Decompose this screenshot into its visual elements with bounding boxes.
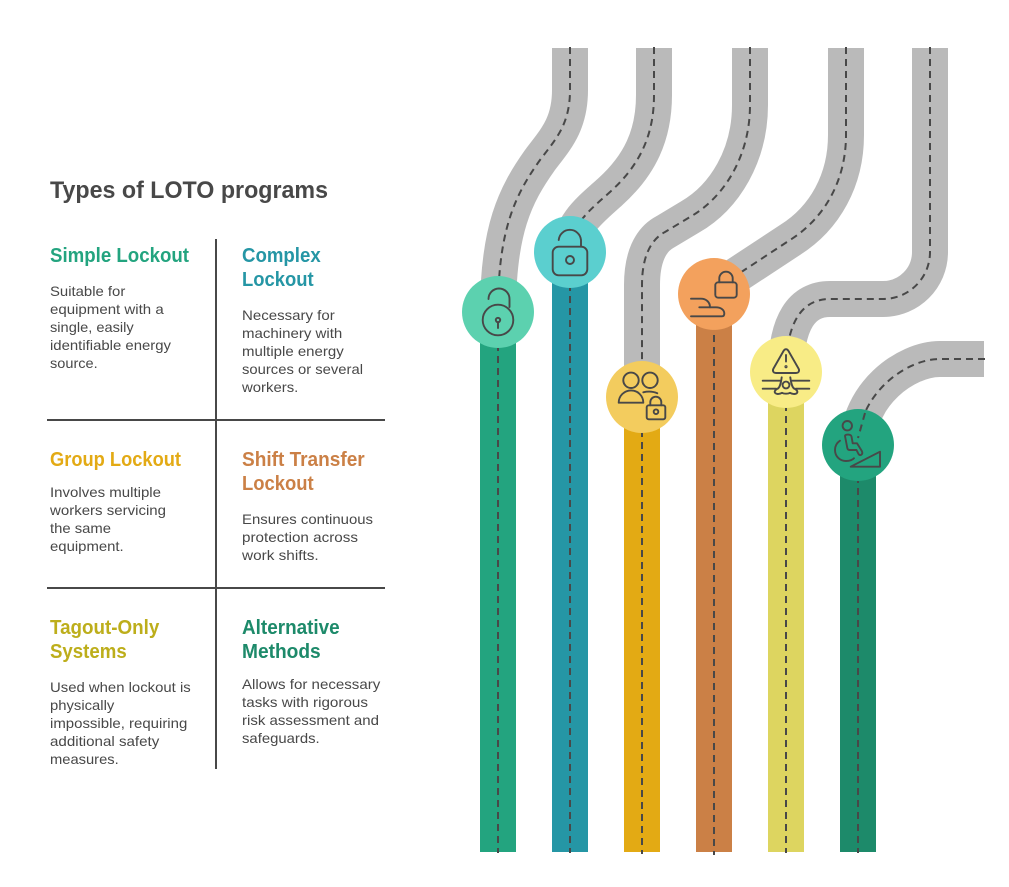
- icon: warning triangle with valve: [750, 336, 822, 408]
- icon: closed padlock: [534, 216, 606, 288]
- panel: tagout-only systems: measures.: [50, 751, 119, 767]
- panel: alternative methods: Methods: [242, 641, 321, 663]
- panel: alternative methods: Alternative: [242, 617, 340, 639]
- panel: group lockout: the same: [50, 520, 111, 536]
- road 6: alternative methods: [858, 359, 985, 445]
- panel: shift transfer lockout: [241, 449, 373, 563]
- panel: alternative methods: tasks with rigorous: [242, 694, 368, 710]
- column 3: amber: [624, 394, 660, 854]
- icon: hand with padlock: [678, 258, 750, 330]
- icon: open padlock: [462, 276, 534, 348]
- panel: group lockout: Involves multiple: [50, 484, 161, 500]
- road 3: group lockout: [642, 47, 750, 397]
- column 6: dark green: [840, 440, 876, 853]
- panel: shift transfer lockout: Shift Transfer: [242, 449, 365, 471]
- panel: simple lockout: Simple Lockout: [50, 245, 189, 267]
- panel: group lockout: equipment.: [50, 538, 124, 554]
- panel: simple lockout: [50, 245, 189, 371]
- panel: alternative methods: safeguards.: [242, 730, 320, 746]
- road 2: complex lockout: [570, 47, 654, 252]
- panel: tagout-only systems: physically: [50, 697, 114, 713]
- panel: complex lockout: Lockout: [242, 269, 314, 291]
- panel: complex lockout: Complex: [242, 245, 321, 267]
- panel: shift transfer lockout: protection across: [242, 529, 358, 545]
- panel: simple lockout: equipment with a: [50, 301, 164, 317]
- panel: complex lockout: workers.: [241, 379, 298, 395]
- panel: complex lockout: sources or several: [242, 361, 363, 377]
- panel: tagout-only systems: impossible, requiring: [50, 715, 187, 731]
- panel: tagout-only systems: Tagout-Only: [50, 617, 160, 639]
- panel: simple lockout: single, easily: [50, 319, 134, 335]
- panel: simple lockout: identifiable energy: [50, 337, 171, 353]
- panel: tagout-only systems: Systems: [50, 641, 127, 663]
- panel: complex lockout: Necessary for: [242, 307, 335, 323]
- panel: shift transfer lockout: work shifts.: [241, 547, 319, 563]
- icon: wheelchair on ramp: [822, 409, 894, 481]
- icon: group with padlock: [606, 361, 678, 433]
- title: Types of LOTO programs: [50, 177, 328, 204]
- grid dividers: [47, 239, 385, 769]
- panel: tagout-only systems: additional safety: [50, 733, 159, 749]
- panel: tagout-only systems: Used when lockout is: [50, 679, 191, 695]
- panel: group lockout: [49, 449, 181, 554]
- panel: simple lockout: Suitable for: [50, 283, 126, 299]
- column 1: green: [480, 308, 516, 853]
- road 1: simple lockout: [498, 47, 570, 312]
- panel: shift transfer lockout: Lockout: [242, 473, 314, 495]
- panel: shift transfer lockout: Ensures continuous: [242, 511, 373, 527]
- road 5: tagout-only: [786, 47, 930, 372]
- panel: alternative methods: [242, 617, 380, 746]
- panel: simple lockout: source.: [50, 355, 98, 371]
- road 4: shift transfer lockout: [714, 47, 846, 290]
- panel: group lockout: Group Lockout: [50, 449, 181, 471]
- panel: tagout-only systems: [50, 617, 191, 767]
- panel: complex lockout: machinery with: [242, 325, 342, 341]
- panel: alternative methods: risk assessment and: [242, 712, 379, 728]
- column 2: teal: [552, 248, 588, 853]
- panel: group lockout: workers servicing: [49, 502, 166, 518]
- panel: complex lockout: multiple energy: [242, 343, 344, 359]
- panel: complex lockout: [241, 245, 363, 395]
- panel: alternative methods: Allows for necessary: [242, 676, 380, 692]
- column 4: orange: [696, 287, 732, 855]
- column 5: yellow: [768, 368, 804, 853]
